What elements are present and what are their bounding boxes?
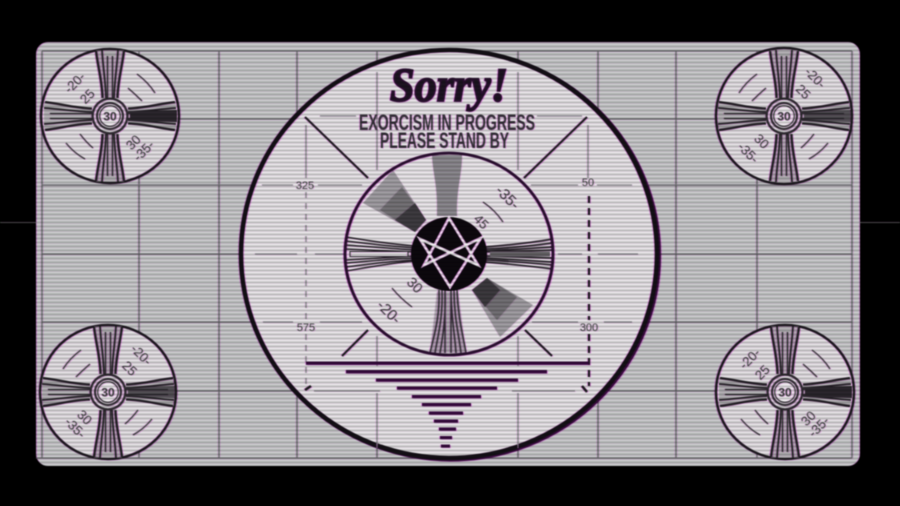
dial label 25: 25 (77, 86, 98, 107)
scale label 575: 575 (297, 322, 315, 334)
corner dial top right (716, 48, 852, 184)
label -35-: -35- (492, 182, 523, 213)
dial number 30: 30 (778, 386, 792, 400)
stepped bars (306, 362, 589, 448)
corner dial bottom left (40, 325, 176, 459)
dial label -35-: -35- (805, 413, 832, 440)
unicursal hexagram (420, 218, 481, 287)
label 30: 30 (404, 274, 426, 296)
label 45: 45 (471, 211, 492, 232)
scale label 325: 325 (296, 180, 314, 192)
left line fan (346, 237, 415, 271)
top grey band (432, 155, 462, 216)
background grid (36, 51, 852, 458)
dial label 25: 25 (119, 358, 140, 379)
scanlines (36, 42, 860, 466)
dial label -35-: -35- (130, 137, 157, 164)
dial label -20-: -20- (61, 69, 88, 96)
dial label 25: 25 (752, 362, 773, 383)
grey wedge lower right (472, 278, 533, 337)
scale label 300: 300 (580, 322, 598, 334)
label -20-: -20- (373, 297, 404, 328)
inner guide lines (255, 72, 638, 448)
center disc (411, 217, 487, 291)
message line 2: PLEASE STAND BY (380, 128, 509, 153)
dial label 30: 30 (798, 408, 819, 429)
scale label 50: 50 (582, 177, 594, 189)
dial label 30: 30 (751, 131, 772, 152)
right line fan (485, 239, 553, 269)
corner dial top left (41, 49, 179, 183)
bottom line fan (430, 290, 466, 353)
diagonal corner lines (305, 117, 587, 392)
dial label -20-: -20- (736, 345, 763, 372)
dial label 30: 30 (74, 407, 95, 428)
dial label 30: 30 (123, 132, 144, 153)
dial label -20-: -20- (802, 64, 829, 91)
main circle (241, 50, 658, 459)
inner circle (345, 153, 553, 355)
dial label -35-: -35- (735, 139, 762, 166)
test card panel (36, 42, 860, 466)
corner dial bottom right (716, 325, 854, 459)
arc ticks (392, 202, 503, 307)
headline Sorry!: Sorry! (390, 59, 508, 112)
grey wedge upper left (363, 170, 426, 232)
dial number 30: 30 (777, 110, 791, 124)
message line 1: EXORCISM IN PROGRESS (359, 110, 535, 135)
dial number 30: 30 (103, 110, 117, 124)
dial label -35-: -35- (62, 414, 89, 441)
right dashed scale (588, 196, 590, 386)
dial number 30: 30 (101, 386, 115, 400)
dial label 25: 25 (793, 81, 814, 102)
dial label -20-: -20- (128, 341, 155, 368)
faint horizontal sync line (0, 222, 900, 224)
